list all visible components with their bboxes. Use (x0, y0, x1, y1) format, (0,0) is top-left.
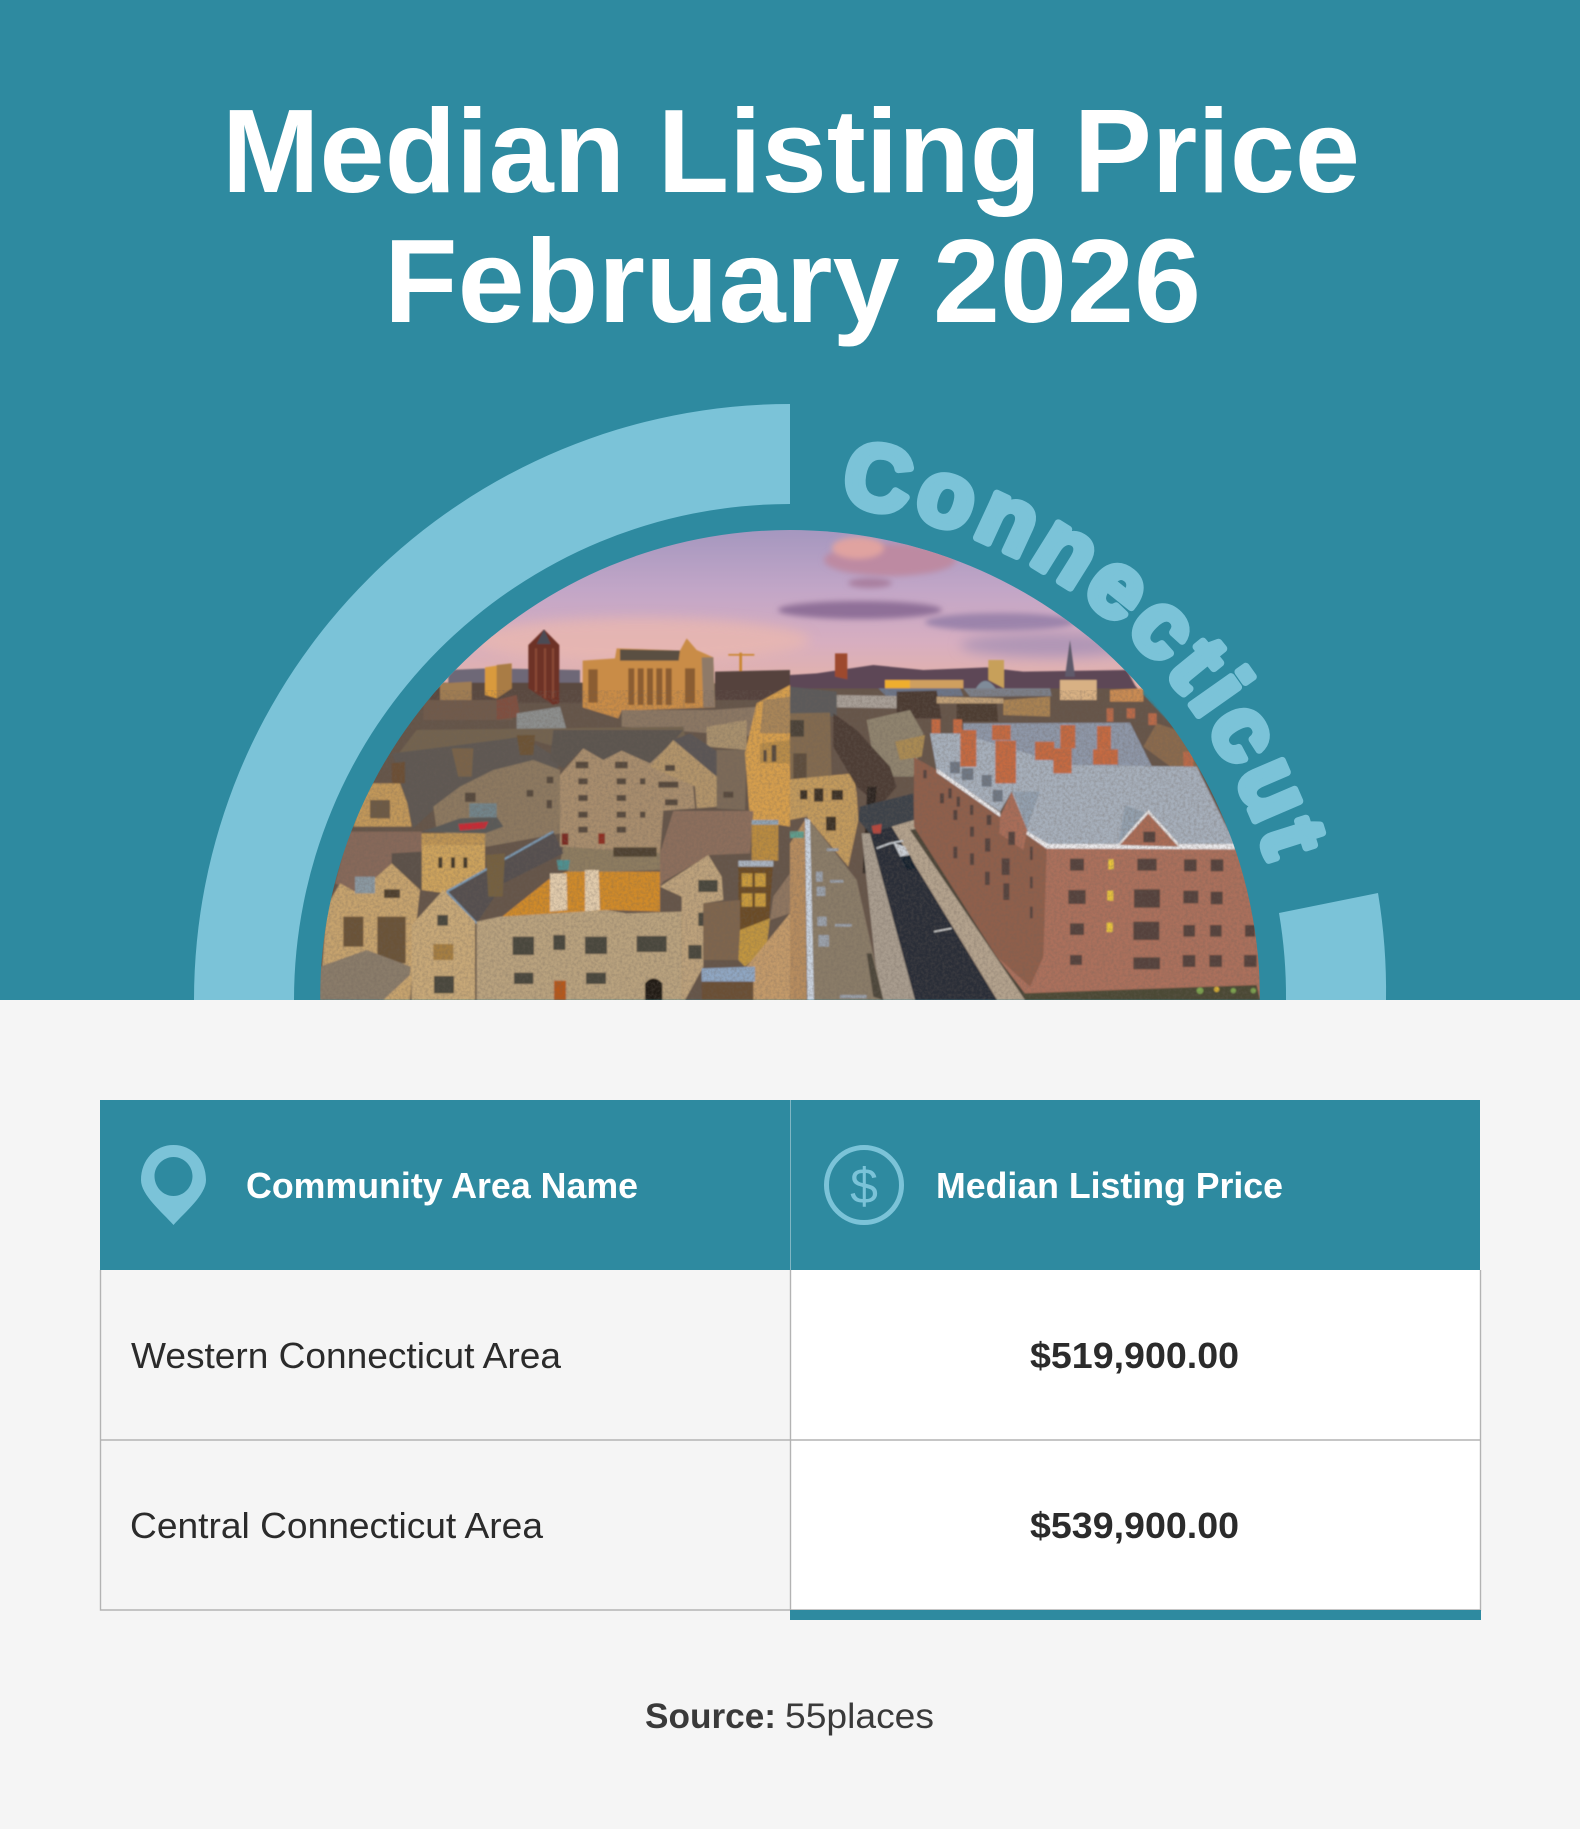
source note (645, 1697, 934, 1736)
icon: dollar in circle (826, 1148, 902, 1222)
right half of buildings (790, 640, 1260, 1000)
panel: teal header (0, 0, 1580, 1000)
row 1 label: Western Connecticut Area (131, 1335, 562, 1376)
icon: location pin (141, 1145, 206, 1225)
column heading: community area name: Community Area Name (246, 1165, 638, 1206)
title (222, 85, 1360, 348)
row 2 label: Central Connecticut Area (130, 1505, 544, 1546)
decorative arc: right segment (1279, 893, 1386, 1000)
decorative arc: left segment (194, 404, 790, 1000)
table header row (100, 1100, 1480, 1270)
photo grain overlay (320, 690, 1260, 1000)
sky (436, 530, 1144, 690)
table cell: white price column (790, 1270, 1480, 1610)
row 1 value: $519,900.00 (1030, 1335, 1239, 1376)
source note: Source: (645, 1697, 776, 1736)
icon: dollar in circle: $ (850, 1158, 878, 1214)
accent bar (790, 1610, 1481, 1620)
column heading: median listing price: Median Listing Price (936, 1165, 1283, 1206)
table grid lines (100, 1270, 1481, 1610)
panel: table (100, 1100, 1481, 1620)
curved label: Connecticut: Connecticut (844, 442, 1326, 864)
title: February 2026 (384, 215, 1201, 348)
title: Median Listing Price (222, 85, 1360, 218)
left half of buildings (320, 629, 790, 1000)
photo: aerial view of city in dome (320, 530, 1260, 1000)
source note: 55places (785, 1697, 934, 1736)
row 2 value: $539,900.00 (1030, 1505, 1239, 1546)
